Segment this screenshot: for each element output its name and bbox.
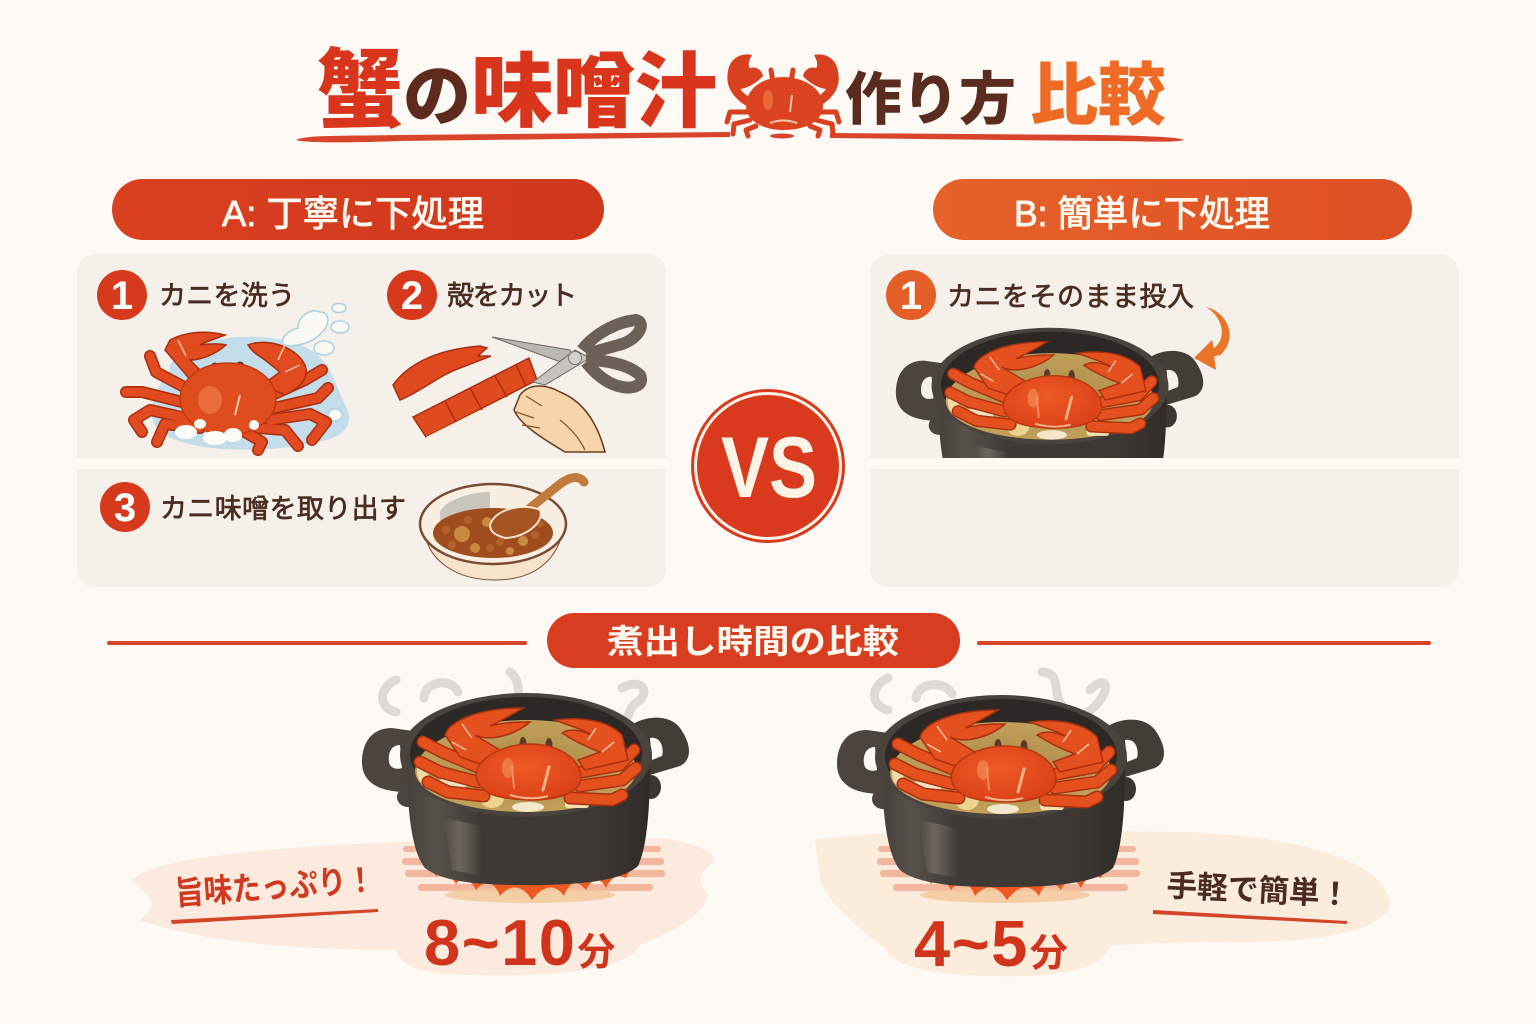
panel: A simmer time xyxy=(133,672,715,979)
section heading: simmering time: 煮出し時間の比較 xyxy=(607,623,899,660)
icon: title crab xyxy=(727,54,839,136)
icon: burner flames xyxy=(402,846,665,903)
panel: method A xyxy=(77,254,666,587)
icon: pot with whole crab xyxy=(896,328,1204,458)
icon: arrow into pot xyxy=(1194,307,1230,370)
title: 蟹 xyxy=(317,43,403,139)
step 2 heading: 殻をカット xyxy=(447,281,577,311)
title: 作り方 xyxy=(845,68,1016,132)
brush background xyxy=(815,830,1390,976)
step 1 heading: カニをそのまま投入 xyxy=(947,282,1194,312)
step 2 heading: 2 xyxy=(401,274,423,318)
icon: burner flames xyxy=(877,846,1140,903)
icon: steam xyxy=(382,672,644,716)
time: 4–5 minutes: 4~5分 xyxy=(914,907,1069,980)
icon: steam xyxy=(874,672,1106,712)
icon: pot on stove xyxy=(837,695,1164,887)
icon: bowl of crab miso xyxy=(420,478,584,580)
section heading: simmering time xyxy=(107,613,1431,668)
panel: B simmer time xyxy=(815,672,1390,980)
icon: crab being washed xyxy=(126,304,349,450)
header: B: B: 簡単に下処理 xyxy=(1014,193,1270,234)
VS badge: VS xyxy=(721,420,817,516)
step 1 heading xyxy=(886,270,1194,320)
brush background xyxy=(133,838,715,976)
title underline xyxy=(296,132,1184,142)
step 1 heading xyxy=(97,270,295,320)
icon: pot on stove xyxy=(362,693,689,885)
header: A xyxy=(112,179,604,240)
step 1 heading: カニを洗う xyxy=(159,281,295,311)
panel: method B xyxy=(870,255,1459,587)
step 3 heading xyxy=(100,482,406,532)
callout: umami xyxy=(171,861,378,924)
step 1 heading: 1 xyxy=(900,274,922,318)
step 1 heading: 1 xyxy=(111,274,133,318)
step 2 heading xyxy=(387,270,577,320)
header: B xyxy=(933,179,1412,240)
title: の xyxy=(403,59,471,135)
callout: umami: 旨味たっぷり！ xyxy=(174,861,376,912)
title: 比較 xyxy=(1030,58,1166,134)
title xyxy=(296,43,1184,142)
header: A: A: 丁寧に下処理 xyxy=(222,193,484,234)
step 3 heading: カニ味噌を取り出す xyxy=(160,494,406,524)
VS badge xyxy=(691,389,845,543)
time: 8–10 minutes: 8~10分 xyxy=(424,906,617,979)
icon: scissors cutting crab leg xyxy=(393,320,641,452)
title: 味噌汁 xyxy=(471,47,717,138)
callout: easy: 手軽で簡単！ xyxy=(1166,868,1351,913)
step 3 heading: 3 xyxy=(114,486,136,530)
